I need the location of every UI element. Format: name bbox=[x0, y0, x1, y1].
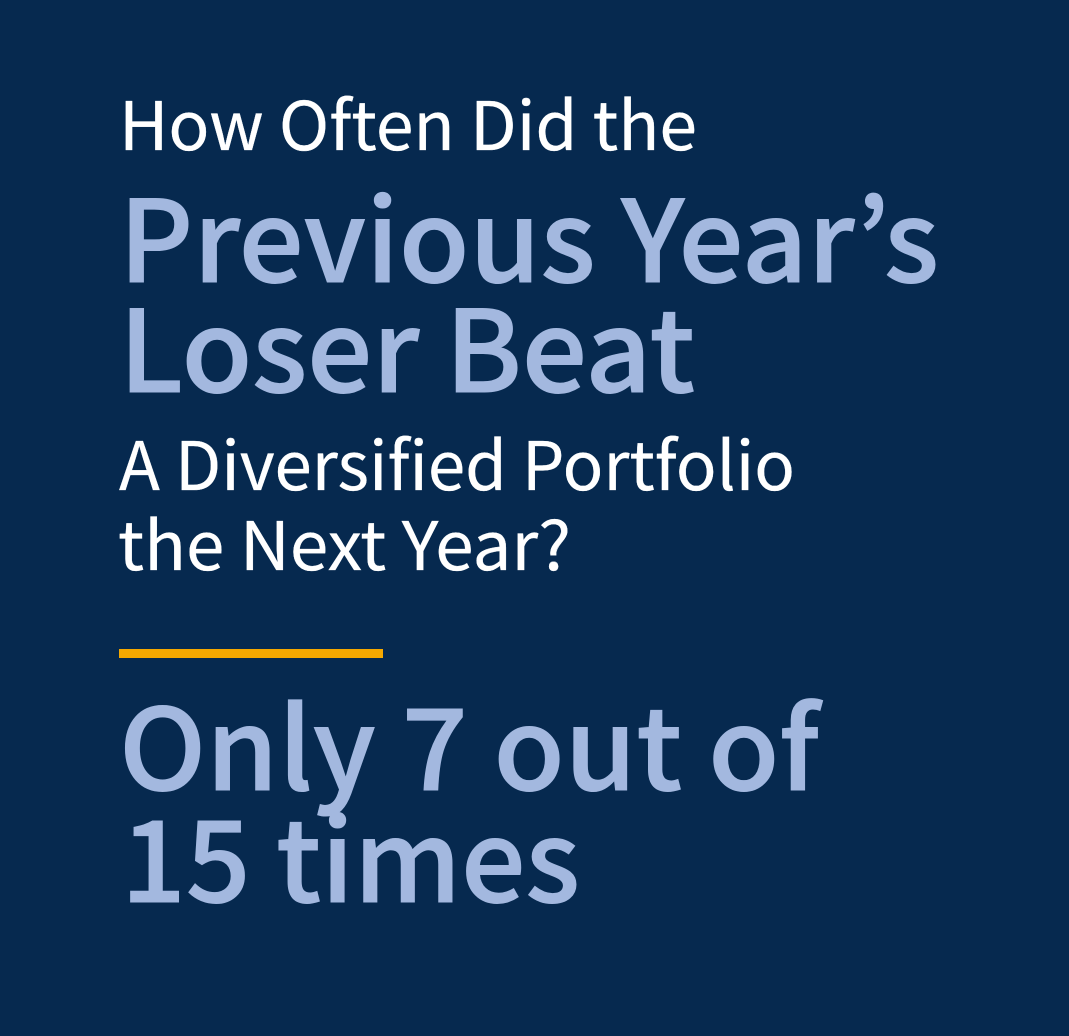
heading: intro line: How Often Did the bbox=[119, 73, 697, 170]
answer: line two: 15 times bbox=[121, 771, 580, 935]
heading: highlighted line one: Previous Year’s bbox=[119, 151, 939, 315]
heading: closing line one: A Diversified Portfolio bbox=[119, 413, 795, 510]
answer: line one: Only 7 out of bbox=[119, 659, 823, 823]
heading: closing line two: the Next Year? bbox=[118, 493, 571, 590]
heading: highlighted line two: Loser Beat bbox=[119, 261, 695, 425]
divider: gold rule bbox=[119, 649, 383, 658]
